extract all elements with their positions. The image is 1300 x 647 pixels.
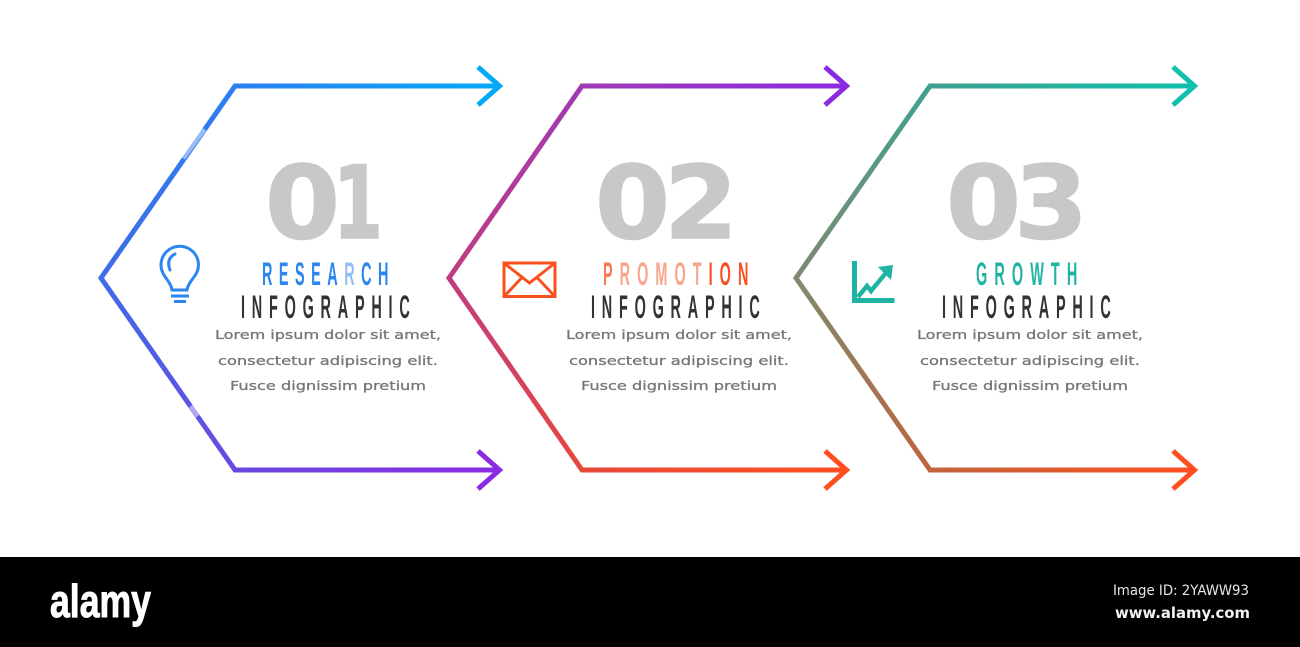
body text: Fusce dignissim pretium <box>581 378 777 393</box>
icon: growth chart <box>852 261 894 303</box>
body text: consectetur adipiscing elit. <box>920 353 1140 368</box>
arrow outline 3 <box>796 67 1194 489</box>
number 01: 0 <box>265 144 340 262</box>
heading promotion: PROMOTION <box>603 258 748 293</box>
heading infographic: INFOGRAPHIC <box>591 291 760 326</box>
body text: Lorem ipsum dolor sit amet, <box>215 327 441 342</box>
number 02: 2 <box>664 144 738 262</box>
body text: consectetur adipiscing elit. <box>218 353 438 368</box>
body text <box>566 327 792 393</box>
panel: step 3 growth <box>796 67 1194 489</box>
body text <box>215 327 441 393</box>
website: www.alamy.com <box>1115 604 1250 622</box>
body text <box>917 327 1143 393</box>
body text: Fusce dignissim pretium <box>932 378 1128 393</box>
arrow outline 1 <box>101 67 500 489</box>
number 02: 0 <box>595 144 670 262</box>
panel: step 1 research <box>101 67 500 489</box>
heading infographic: INFOGRAPHIC <box>942 291 1111 326</box>
number 01: 1 <box>333 144 383 262</box>
number 03 <box>946 144 1088 262</box>
number 02 <box>595 144 738 262</box>
body text: Lorem ipsum dolor sit amet, <box>917 327 1143 342</box>
heading growth: GROWTH <box>976 258 1077 293</box>
heading infographic: INFOGRAPHIC <box>241 291 410 326</box>
body text: Lorem ipsum dolor sit amet, <box>566 327 792 342</box>
icon: envelope <box>504 263 555 296</box>
number 03: 0 <box>946 144 1021 262</box>
number 01 <box>265 144 383 262</box>
icon: light bulb <box>161 246 198 302</box>
body text: Fusce dignissim pretium <box>230 378 426 393</box>
number 03: 3 <box>1014 144 1088 262</box>
alamy logo: alamy <box>50 575 151 627</box>
panel: step 2 promotion <box>449 67 846 489</box>
footer band <box>0 557 1300 647</box>
body text: consectetur adipiscing elit. <box>569 353 789 368</box>
image id: Image ID: 2YAWW93 <box>1113 583 1249 599</box>
heading research: RESEARCH <box>262 258 388 293</box>
arrow outline 2 <box>449 67 846 489</box>
